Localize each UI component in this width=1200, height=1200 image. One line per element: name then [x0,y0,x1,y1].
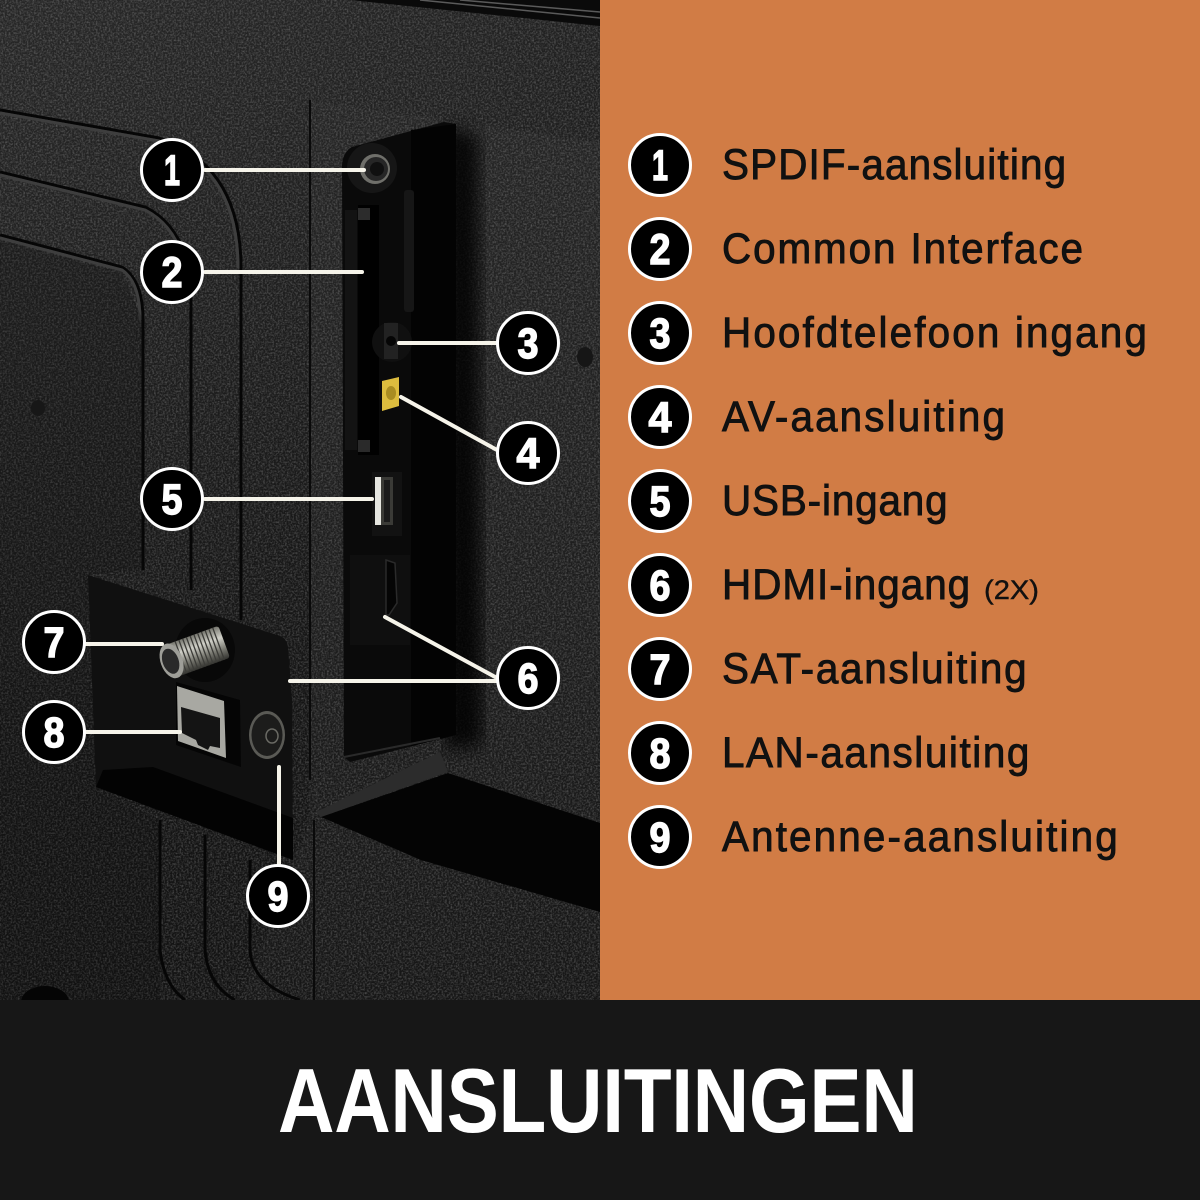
shadow beside port bar [445,125,482,750]
legend item 7 [630,638,1027,700]
legend item 4: AV-aansluiting [722,392,1005,440]
badge 4 [498,422,558,484]
legend item 2 [630,218,1083,280]
legend item 7: 7 [650,646,670,694]
ledge highlight [316,752,448,817]
legend item 1: 1 [652,142,668,190]
HDMI port [385,559,398,616]
badge 1 [142,140,202,200]
legend item 9 [630,806,1118,868]
mount hole bottom left [21,986,69,1000]
badge 9 [248,866,308,926]
recess seam [310,100,314,1000]
legend item 1: SPDIF-aansluiting [722,140,1066,188]
AV port yellow [382,377,399,411]
antenna port [249,711,285,759]
legend item 3: Hoofdtelefoon ingang [722,308,1147,356]
legend item 5: 5 [650,478,670,526]
badge 3 [498,312,558,374]
badge 6: 6 [518,655,538,703]
badge 3: 3 [518,320,538,368]
badge 7 [24,612,84,672]
legend item 8: LAN-aansluiting [722,728,1029,776]
legend item 9: 9 [650,814,670,862]
SAT connector [155,618,235,682]
LAN port [176,682,241,767]
headphone port [372,323,412,359]
legend item 5 [630,470,948,532]
lower ledge [321,773,600,912]
badge 2 [142,242,202,302]
legend list [630,134,1147,868]
badge 5: 5 [162,476,182,524]
legend item 3 [630,302,1147,364]
legend item 5: USB-ingang [722,476,948,524]
legend item 8: 8 [650,730,670,778]
screw dimple left [31,400,45,416]
callout lines [85,170,497,865]
USB port [375,477,393,525]
badge 8 [24,702,84,762]
legend item 9: Antenne-aansluiting [722,812,1118,860]
legend item 6 [630,554,1039,616]
legend item 6: HDMI-ingang [722,560,970,608]
legend item 8 [630,722,1029,784]
rear port cut-out [88,575,293,860]
legend item 6: 6 [650,562,670,610]
top bezel of the TV [350,0,600,26]
legend item 2: 2 [650,226,670,274]
port bar inner stripe [404,190,414,312]
TV rear housing: embossed left panels [0,110,300,1000]
cut-out lower shelf [96,767,293,860]
side port bar [342,122,456,762]
legend item 7: SAT-aansluiting [722,644,1027,692]
panel: TV back photo [0,0,600,1018]
callout badges on photo [24,140,558,926]
surface grain texture [0,0,600,1000]
legend item 6: (2X) [984,575,1039,605]
panel: orange legend background [600,0,1200,1000]
title: AANSLUITINGEN [278,1049,918,1151]
legend item 4 [630,386,1005,448]
legend item 3: 3 [650,310,670,358]
TV rear housing: right recessed section [486,396,600,696]
badge 6 [498,648,558,708]
badge 1: 1 [164,147,180,195]
screw dimple right [577,347,593,367]
panel: title band background [0,1000,1200,1200]
photo background [0,0,600,310]
legend item 1 [630,134,1066,196]
legend item 4: 4 [648,394,672,442]
badge 4: 4 [516,430,540,478]
badge 5 [142,468,202,530]
badge 8: 8 [44,709,64,757]
badge 9: 9 [268,873,288,921]
badge 2: 2 [162,249,182,297]
Common Interface slot [345,205,379,455]
SPDIF port [347,143,397,193]
legend item 2: Common Interface [722,224,1083,272]
badge 7: 7 [44,619,64,667]
